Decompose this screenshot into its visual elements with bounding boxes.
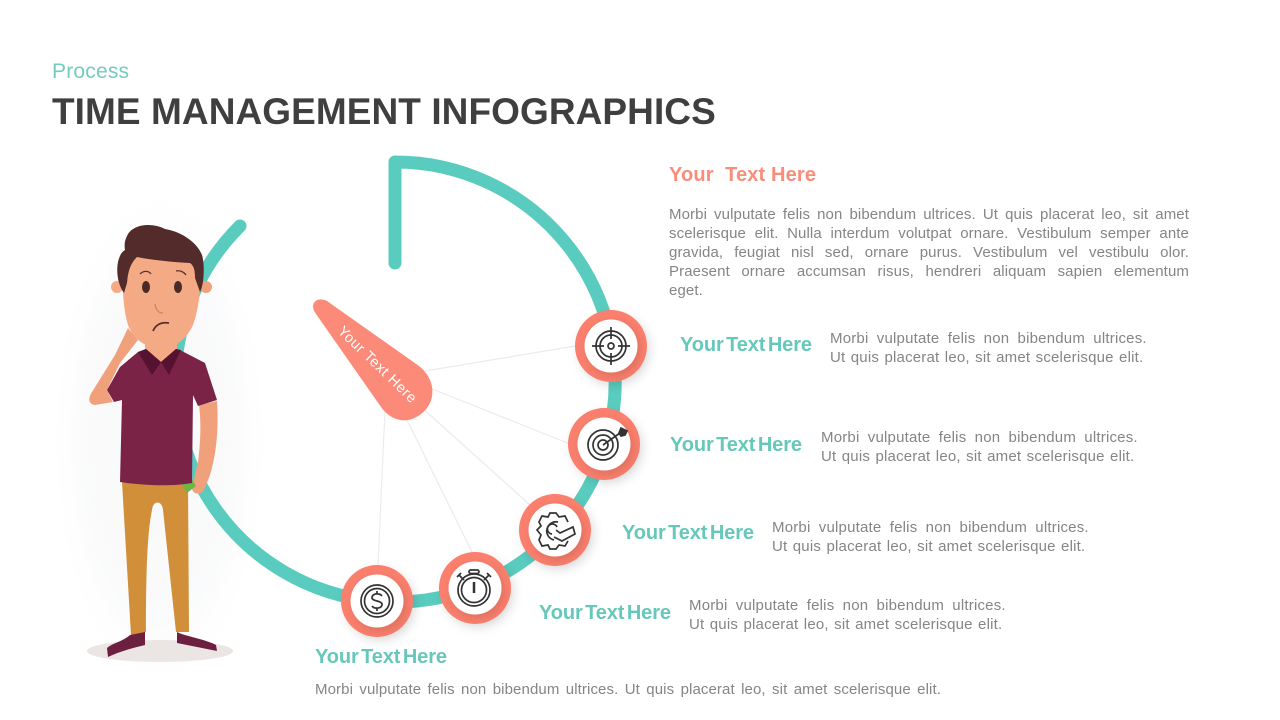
face xyxy=(123,255,200,348)
text: step 2 xyxy=(821,429,1138,465)
shirt xyxy=(107,349,217,485)
heading: step 2: Your Text Here xyxy=(670,434,802,456)
paragraph: top text block: Praesent ornare accumsan risus, hendreri aliquam sapien elementum xyxy=(669,263,1189,280)
text: step 2: Ut quis placerat leo, sit amet scelerisque elit. xyxy=(821,448,1134,465)
heading: step 5: Your Text Here xyxy=(315,646,447,668)
teal time arc xyxy=(175,162,615,602)
hair xyxy=(117,225,204,293)
paragraph: top text block xyxy=(669,206,1189,299)
icon: dollar coin xyxy=(341,565,413,637)
trousers xyxy=(122,482,189,635)
money xyxy=(181,476,196,493)
face features xyxy=(140,271,186,331)
text: step 3: Morbi vulputate felis non bibendum ultrices. xyxy=(772,519,1089,536)
soft glow behind character xyxy=(48,180,272,700)
paragraph: top text block: eget. xyxy=(669,282,703,299)
subtitle: Process xyxy=(52,60,129,83)
paragraph: top text block: Morbi vulputate felis non bibendum ultrices. Ut quis placerat leo, sit amet xyxy=(669,206,1189,223)
text: step 1: Morbi vulputate felis non bibendum ultrices. xyxy=(830,330,1147,347)
heading: top text block: Your Text Here xyxy=(669,164,816,186)
heading: step 3: Your Text Here xyxy=(622,522,754,544)
ground shadow xyxy=(87,640,233,662)
shoes xyxy=(107,632,145,657)
heading: step 4: Your Text Here xyxy=(539,602,671,624)
icon: gear with hand xyxy=(519,494,591,566)
text: step 4: Morbi vulputate felis non bibendum ultrices. xyxy=(689,597,1006,614)
right arm xyxy=(192,401,218,494)
text: step 3: Ut quis placerat leo, sit amet scelerisque elit. xyxy=(772,538,1085,555)
icon: crosshair xyxy=(575,310,647,382)
heading: step 1: Your Text Here xyxy=(680,334,812,356)
character: thinking man xyxy=(87,225,233,662)
text: step 3 xyxy=(772,519,1089,555)
title: TIME MANAGEMENT INFOGRAPHICS xyxy=(52,91,716,132)
neck xyxy=(145,335,177,364)
paragraph: top text block: gravida, feugiat nisl sed, ornare purus. Vestibulum vel vestibulu olor. xyxy=(669,244,1189,261)
ears xyxy=(111,281,123,293)
left arm and hand on chin xyxy=(89,328,138,405)
collar xyxy=(138,349,181,375)
pointer: Your Text Here: Your Text Here xyxy=(334,323,419,406)
text: step 1 xyxy=(830,330,1147,366)
text: step 4 xyxy=(689,597,1006,633)
icon: target with arrow xyxy=(568,408,640,480)
text: step 5: Morbi vulputate felis non bibendum ultrices. Ut quis placerat leo, sit amet scelerisque elit. xyxy=(315,681,941,698)
connector lines xyxy=(378,346,575,565)
paragraph: top text block: scelerisque elit. Nulla interdum volutpat ornare. Vestibulum semper ante xyxy=(669,225,1189,242)
text: step 4: Ut quis placerat leo, sit amet scelerisque elit. xyxy=(689,616,1002,633)
text: step 2: Morbi vulputate felis non bibendum ultrices. xyxy=(821,429,1138,446)
pointer: Your Text Here xyxy=(313,299,432,420)
text: step 1: Ut quis placerat leo, sit amet scelerisque elit. xyxy=(830,349,1143,366)
icon: stopwatch xyxy=(439,552,511,624)
